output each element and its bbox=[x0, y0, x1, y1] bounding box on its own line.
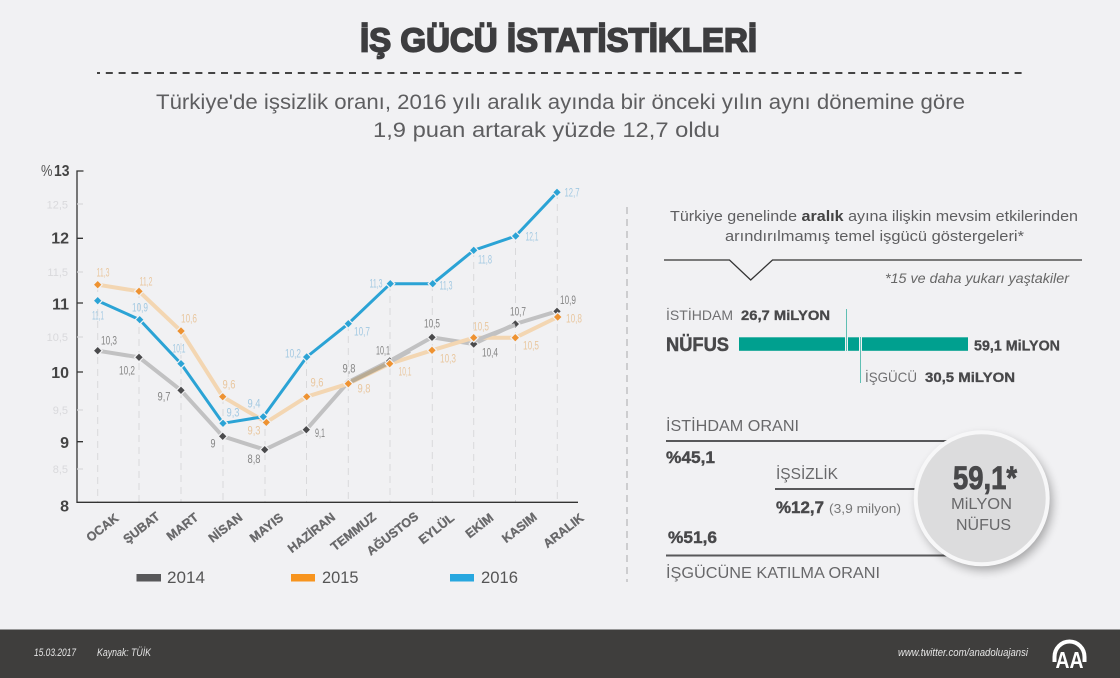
value labels 2015: 9,6 bbox=[222, 378, 236, 392]
value labels 2016: 9,4 bbox=[248, 396, 261, 410]
subtitle: 1,9 puan artarak yüzde 12,7 oldu bbox=[373, 119, 720, 142]
callout notch line bbox=[664, 260, 1082, 280]
legend: 2014 bbox=[167, 568, 205, 587]
x axis month labels: EYLÜL bbox=[415, 510, 457, 547]
y axis: 8 bbox=[60, 498, 69, 516]
value labels 2016: 12,7 bbox=[564, 186, 580, 200]
value labels 2014: 10,4 bbox=[482, 346, 498, 360]
y axis: 13 bbox=[54, 163, 70, 180]
subtitle: Türkiye'de işsizlik oranı, 2016 yılı aralık ayında bir önceki yılın aynı dönemine göre bbox=[156, 91, 965, 114]
y axis: 9,5 bbox=[53, 405, 68, 417]
y axis: 9 bbox=[60, 435, 69, 452]
labour force participation rate bbox=[666, 529, 950, 582]
unemployment rate bbox=[775, 464, 920, 517]
x axis month labels: KASIM bbox=[499, 510, 540, 546]
y axis: % bbox=[41, 163, 53, 180]
unemployment rate: İŞSİZLİK bbox=[776, 464, 838, 483]
series 2014 bbox=[93, 307, 561, 454]
x axis month labels: MART bbox=[164, 510, 201, 543]
series 2015 bbox=[93, 280, 562, 427]
x axis month labels: TEMMUZ bbox=[328, 510, 379, 554]
panel heading: labour indicators: arındırılmamış temel işgücü göstergeleri* bbox=[725, 229, 1024, 245]
x axis month labels: NİSAN bbox=[205, 510, 245, 545]
y axis: 8,5 bbox=[53, 464, 68, 476]
x axis month labels: ARALIK bbox=[541, 511, 586, 551]
title: İŞ GÜCÜ İSTATİSTİKLERİ bbox=[360, 22, 757, 60]
footnote: *15 ve daha yukarı yaştakiler bbox=[885, 271, 1070, 286]
footer: Kaynak: TÜİK bbox=[97, 647, 152, 659]
value labels 2015: 9,3 bbox=[248, 424, 261, 438]
line chart: unemployment by month bbox=[41, 163, 586, 558]
x axis month labels: EKİM bbox=[462, 510, 496, 541]
value labels 2015: 9,6 bbox=[310, 376, 324, 390]
value labels 2014: 9,7 bbox=[158, 390, 171, 404]
population circle bbox=[916, 432, 1052, 570]
value labels 2015: 10,6 bbox=[181, 312, 197, 326]
population bar: İSTİHDAM bbox=[666, 306, 733, 323]
value labels 2014: 8,8 bbox=[248, 452, 261, 466]
value labels 2016: 9,3 bbox=[226, 406, 240, 420]
labour force participation rate: %51,6 bbox=[668, 529, 717, 547]
value labels 2014: 10,2 bbox=[119, 364, 135, 378]
x axis month labels: OCAK bbox=[84, 511, 121, 545]
labour force participation rate: İŞGÜCÜNE KATILMA ORANI bbox=[666, 563, 880, 582]
value labels 2016: 10,1 bbox=[172, 342, 186, 356]
value labels 2016: 10,7 bbox=[354, 324, 370, 338]
footer bbox=[0, 630, 1120, 678]
y axis: 11 bbox=[52, 296, 69, 314]
value labels 2015: 10,5 bbox=[473, 320, 489, 334]
panel heading: labour indicators bbox=[670, 209, 1078, 245]
value labels 2016 bbox=[92, 186, 580, 420]
value labels 2014: 10,3 bbox=[101, 334, 117, 348]
subtitle bbox=[156, 91, 965, 142]
y axis: 12,5 bbox=[47, 200, 68, 212]
x axis month labels: MAYIS bbox=[247, 510, 286, 545]
population bar: 59,1 MiLYON bbox=[974, 338, 1060, 354]
y axis: 10,5 bbox=[47, 332, 68, 344]
population bar: 26,7 MiLYON bbox=[741, 307, 830, 323]
icon: AA logo: AA bbox=[1056, 647, 1084, 673]
value labels 2016: 11,8 bbox=[478, 252, 492, 266]
x axis month labels: ŞUBAT bbox=[121, 509, 163, 546]
value labels 2016: 10,9 bbox=[132, 300, 148, 314]
employment rate bbox=[666, 416, 950, 467]
population circle: 59,1* bbox=[953, 460, 1017, 496]
value labels 2014: 10,7 bbox=[510, 304, 526, 318]
value labels 2014: 9,8 bbox=[342, 362, 356, 376]
legend: 2015 bbox=[322, 568, 358, 587]
value labels 2016: 12,1 bbox=[526, 230, 539, 244]
value labels 2015: 11,2 bbox=[140, 274, 153, 288]
unemployment rate: %12,7 bbox=[776, 499, 824, 517]
value labels 2015: 9,8 bbox=[358, 382, 371, 396]
value labels 2016: 11,1 bbox=[92, 308, 104, 322]
panel heading: labour indicators: Türkiye genelinde aralık ayına ilişkin mevsim etkilerinden bbox=[670, 209, 1078, 225]
value labels 2014: 9,1 bbox=[315, 426, 325, 440]
employment rate: %45,1 bbox=[666, 449, 715, 467]
population circle: MiLYON bbox=[951, 496, 1012, 513]
legend: 2016 bbox=[481, 568, 518, 587]
y axis bbox=[41, 163, 578, 516]
value labels 2014: 9 bbox=[210, 436, 216, 450]
value labels 2014: 10,9 bbox=[560, 293, 576, 307]
legend bbox=[136, 568, 518, 587]
x axis month labels: AĞUSTOS bbox=[363, 509, 421, 558]
value labels 2015: 11,3 bbox=[96, 266, 110, 280]
value labels 2016: 11,3 bbox=[440, 278, 453, 292]
value labels 2015 bbox=[96, 266, 582, 438]
value labels 2015: 10,8 bbox=[566, 312, 582, 326]
population bar: NÜFUS bbox=[666, 333, 729, 356]
y axis: 11,5 bbox=[47, 267, 68, 279]
y axis: 12 bbox=[51, 230, 69, 248]
value labels 2016: 10,2 bbox=[285, 346, 301, 360]
employment rate: İSTİHDAM ORANI bbox=[666, 416, 799, 435]
value labels 2014 bbox=[101, 293, 576, 466]
value labels 2015: 10,5 bbox=[523, 338, 539, 352]
x axis month labels: HAZİRAN bbox=[284, 509, 338, 556]
population bar bbox=[666, 306, 1060, 385]
value labels 2014: 10,5 bbox=[424, 316, 440, 330]
population circle: NÜFUS bbox=[956, 516, 1011, 534]
x axis month labels bbox=[84, 509, 586, 558]
population bar: İŞGÜCÜ bbox=[865, 368, 917, 385]
population bar: 30,5 MiLYON bbox=[925, 369, 1015, 385]
y axis: 10 bbox=[51, 365, 69, 382]
value labels 2015: 10,3 bbox=[440, 352, 456, 366]
footer: 15.03.2017 bbox=[34, 647, 77, 659]
footer: www.twitter.com/anadoluajansi bbox=[898, 647, 1028, 659]
unemployment rate: (3,9 milyon) bbox=[829, 501, 901, 516]
value labels 2015: 10,1 bbox=[398, 364, 412, 378]
value labels 2016: 11,3 bbox=[370, 276, 383, 290]
value labels 2014: 10,1 bbox=[376, 344, 390, 358]
series 2016 bbox=[93, 188, 561, 428]
